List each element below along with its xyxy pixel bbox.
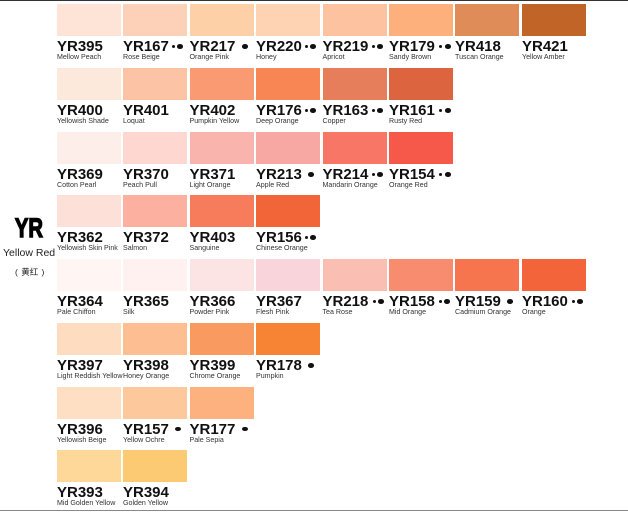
swatch YR370: YR370: [123, 166, 169, 183]
swatch YR154: Orange Red: [389, 181, 428, 189]
swatch YR178: YR178: [256, 357, 302, 374]
swatch YR367: [256, 259, 320, 316]
swatch YR219: Apricot: [322, 53, 345, 61]
swatch YR157: [123, 387, 187, 444]
swatch YR421: Yellow Amber: [522, 53, 565, 61]
swatch YR367: Flesh Pink: [256, 308, 289, 316]
swatch YR365: Silk: [123, 308, 134, 316]
swatch YR398: [123, 323, 187, 380]
swatch YR366: YR366: [190, 293, 235, 310]
swatch YR394: YR394: [123, 484, 169, 501]
swatch YR402: [190, 68, 254, 125]
swatch YR177: [190, 387, 254, 444]
swatch YR154: YR154: [389, 166, 435, 183]
swatch YR402: YR402: [190, 102, 235, 119]
swatch YR213: YR213: [256, 166, 302, 183]
category Chinese name: ( 黄红 ): [15, 267, 44, 277]
category code: YR: [15, 213, 43, 243]
swatch YR400: [57, 68, 121, 125]
swatch YR398: Honey Orange: [123, 372, 169, 380]
swatch YR213: [256, 132, 320, 189]
swatch YR372: [123, 195, 187, 252]
swatch YR370: Peach Pull: [123, 181, 157, 189]
swatch YR400: Yellowish Shade: [57, 117, 109, 125]
swatch YR219: [322, 4, 387, 61]
swatch YR366: Powder Pink: [190, 308, 229, 316]
swatch YR163: Copper: [322, 117, 346, 125]
swatch YR161: Rusty Red: [389, 117, 422, 125]
swatch YR362: Yellowish Skin Pink: [57, 244, 118, 252]
swatch YR178: Pumpkin: [256, 372, 284, 380]
swatch YR369: [57, 132, 121, 189]
swatch YR214: Mandarin Orange: [322, 181, 378, 189]
swatch YR365: YR365: [123, 293, 169, 310]
swatch YR217: YR217: [190, 38, 235, 55]
swatch YR154: [389, 132, 453, 189]
swatch YR156: YR156: [256, 229, 302, 246]
swatch YR157: Yellow Ochre: [123, 436, 165, 444]
swatch YR369: Cotton Pearl: [57, 181, 96, 189]
swatch YR213: Apple Red: [256, 181, 289, 189]
swatch YR371: [190, 132, 254, 189]
swatch YR421: [522, 4, 586, 61]
top border line: [0, 0, 628, 1]
swatch YR176: [256, 68, 320, 125]
swatch YR372: YR372: [123, 229, 169, 246]
swatch YR397: Light Reddish Yellow: [57, 372, 122, 380]
swatch YR371: Light Orange: [190, 181, 231, 189]
swatch YR158: Mid Orange: [389, 308, 426, 316]
swatch YR220: Honey: [256, 53, 277, 61]
swatch YR395: YR395: [57, 38, 103, 55]
swatch YR159: Cadmium Orange: [455, 308, 511, 316]
swatch YR156: [256, 195, 320, 252]
swatch YR401: Loquat: [123, 117, 145, 125]
swatch YR399: YR399: [190, 357, 235, 374]
swatch YR167: [123, 4, 187, 61]
swatch YR220: YR220: [256, 38, 302, 55]
swatch YR167: Rose Beige: [123, 53, 160, 61]
swatch YR218: YR218: [322, 293, 368, 310]
swatch YR163: [322, 68, 387, 125]
category label: Yellow Red: [3, 213, 55, 277]
swatch YR156: Chinese Orange: [256, 244, 308, 252]
swatch YR161: [389, 68, 453, 125]
swatch YR398: YR398: [123, 357, 169, 374]
swatch YR364: Pale Chiffon: [57, 308, 96, 316]
swatch YR364: YR364: [57, 293, 103, 310]
swatch YR163: YR163: [322, 102, 368, 119]
swatch YR219: YR219: [322, 38, 368, 55]
swatch YR370: [123, 132, 187, 189]
swatch YR362: YR362: [57, 229, 103, 246]
swatch YR364: [57, 259, 121, 316]
swatch YR177: Pale Sepia: [190, 436, 224, 444]
swatch YR393: Mid Golden Yellow: [57, 499, 115, 507]
swatch YR403: Sanguine: [190, 244, 219, 252]
swatch YR418: YR418: [455, 38, 501, 55]
swatch YR179: [389, 4, 453, 61]
swatch YR418: Tuscan Orange: [455, 53, 504, 61]
swatch YR372: Salmon: [123, 244, 147, 252]
swatch YR179: YR179: [389, 38, 435, 55]
swatch YR179: Sandy Brown: [389, 53, 431, 61]
swatch YR394: Golden Yellow: [123, 499, 168, 507]
swatch YR214: [322, 132, 387, 189]
swatch YR161: YR161: [389, 102, 435, 119]
swatch YR401: [123, 68, 187, 125]
swatch YR395: Mellow Peach: [57, 53, 101, 61]
swatch YR399: Chrome Orange: [190, 372, 240, 380]
swatch YR403: YR403: [190, 229, 235, 246]
swatch YR158: [389, 259, 453, 316]
swatch YR177: YR177: [190, 420, 235, 438]
swatch YR396: [57, 387, 121, 444]
swatch YR399: [190, 323, 254, 380]
swatch YR220: [256, 4, 320, 61]
swatch YR400: YR400: [57, 102, 103, 119]
swatch YR371: YR371: [190, 166, 235, 183]
swatch YR176: Deep Orange: [256, 117, 299, 125]
swatch YR167: YR167: [123, 38, 169, 55]
swatch YR160: YR160: [522, 293, 568, 310]
swatch YR214: YR214: [322, 166, 368, 183]
swatch YR393: [57, 450, 121, 510]
swatch YR217: Orange Pink: [190, 53, 229, 61]
swatch YR159: YR159: [455, 293, 501, 310]
swatch YR366: [190, 259, 254, 316]
swatch YR157: YR157: [123, 420, 169, 438]
swatch YR401: YR401: [123, 102, 169, 119]
swatch YR396: Yellowish Beige: [57, 436, 106, 444]
swatch YR217: [190, 4, 254, 61]
bottom border line: [0, 510, 628, 511]
swatch YR394: [123, 450, 187, 510]
swatch YR395: [57, 4, 121, 61]
swatch YR418: [455, 4, 519, 61]
swatch YR396: YR396: [57, 420, 103, 438]
swatch YR397: [57, 323, 122, 380]
swatch YR178: [256, 323, 320, 380]
swatch YR362: [57, 195, 121, 252]
swatch YR402: Pumpkin Yellow: [190, 117, 239, 125]
swatch YR158: YR158: [389, 293, 435, 310]
swatch YR397: YR397: [57, 357, 103, 374]
swatch YR393: YR393: [57, 484, 103, 501]
swatch YR369: YR369: [57, 166, 103, 183]
category name: Yellow Red: [3, 247, 55, 259]
swatch YR218: Tea Rose: [322, 308, 352, 316]
swatch YR218: [322, 259, 387, 316]
swatch YR160: Orange: [522, 308, 546, 316]
swatch YR160: [522, 259, 586, 316]
swatch YR365: [123, 259, 187, 316]
swatch YR403: [190, 195, 254, 252]
swatch YR421: YR421: [522, 38, 568, 55]
swatch YR176: YR176: [256, 102, 302, 119]
swatch YR159: [455, 259, 519, 316]
swatch YR367: YR367: [256, 293, 302, 310]
